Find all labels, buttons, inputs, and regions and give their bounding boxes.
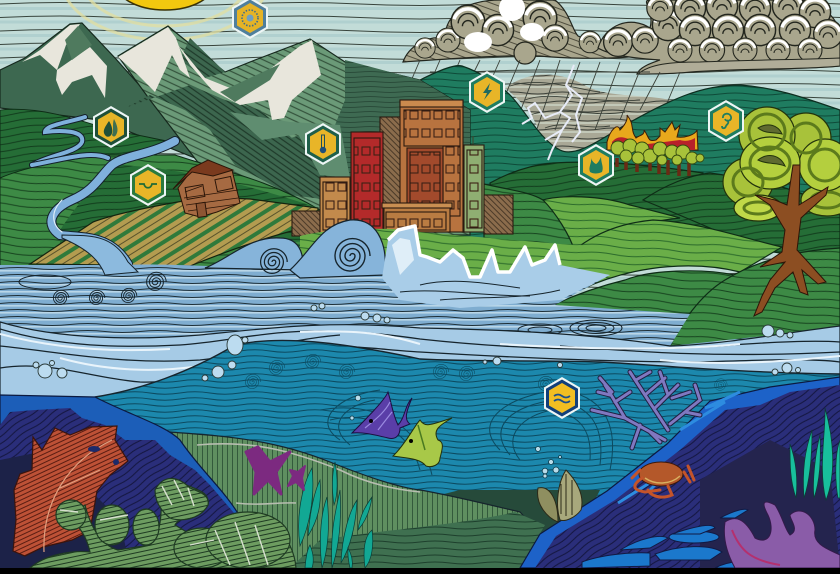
farmland	[30, 197, 318, 266]
hill: bright	[543, 197, 680, 252]
hex icon: sun	[232, 0, 268, 39]
ridge shading	[125, 85, 330, 200]
swirling waves	[19, 220, 622, 336]
sun with halo	[61, 0, 269, 40]
right hills group	[484, 162, 840, 290]
city	[292, 100, 513, 236]
purple branching coral	[592, 372, 700, 448]
hex icon: water drops	[93, 106, 129, 148]
hill: dark right	[643, 173, 840, 262]
mountain snow caps	[22, 24, 321, 120]
tree crowns	[611, 139, 704, 165]
wave: left curl	[205, 238, 303, 270]
storm cloud right	[598, 0, 840, 74]
wave: breaking foam	[382, 226, 610, 308]
burning trees	[607, 115, 704, 176]
river mouth	[62, 235, 138, 275]
bottom black strip	[0, 568, 840, 574]
icon: crab	[632, 462, 694, 497]
building: low brown right	[484, 195, 513, 234]
green coral	[30, 478, 296, 568]
mountain left dark face	[0, 23, 200, 160]
wave: centre curl	[290, 220, 385, 278]
grey rainy hill	[505, 74, 682, 154]
deep water	[0, 340, 840, 574]
island: left	[553, 271, 735, 314]
river	[32, 117, 175, 264]
seabed: dark lower	[350, 490, 600, 568]
hill: bright foreground	[560, 220, 782, 290]
ocean swirls	[245, 354, 727, 475]
lower left hill	[0, 155, 320, 270]
lightning	[522, 65, 582, 160]
rain grid	[405, 60, 680, 135]
building: tan	[320, 177, 350, 234]
pale lower water band	[0, 322, 840, 400]
icon: starfish small	[288, 466, 305, 490]
icon: red coral leaf	[13, 426, 128, 556]
hill: mid left	[484, 184, 600, 266]
upper left dark hill	[0, 109, 172, 190]
tree	[723, 107, 840, 316]
dark slope behind farmland	[60, 165, 318, 262]
left rock	[0, 395, 250, 568]
building: low front block	[382, 203, 452, 232]
teal hill behind city	[420, 66, 840, 240]
building: grey back	[380, 117, 402, 212]
building: orange tower	[400, 100, 463, 232]
hex icon: ocean waves	[544, 377, 580, 419]
island: right	[670, 248, 840, 346]
sky with horizontal lines	[0, 0, 840, 330]
bubbles from clam	[350, 395, 562, 478]
flames	[607, 115, 698, 150]
hex icon: lightning	[469, 71, 505, 113]
hill: far dark green	[490, 162, 720, 260]
seabed: green slope	[170, 432, 540, 568]
left seagrass	[299, 462, 373, 568]
bubbles at surface	[33, 303, 800, 381]
icon: purple fish	[352, 392, 412, 439]
tree canopy	[723, 107, 840, 221]
hex icon: wind	[708, 100, 744, 142]
mountain body	[118, 26, 470, 235]
hex icon: thermometer	[305, 123, 341, 165]
purple coral bottom right	[724, 502, 840, 568]
hex icon: ground subsidence	[130, 164, 166, 206]
icon: green fish	[393, 418, 452, 467]
mountain range	[0, 23, 470, 235]
icon: starfish large	[246, 447, 290, 494]
grass in front of city	[300, 229, 590, 285]
seabed: lower dark slope	[290, 512, 545, 568]
canopy rings	[733, 114, 840, 214]
hex icon: wildfire	[578, 144, 614, 186]
trunks	[617, 158, 689, 176]
house	[173, 160, 240, 217]
tree trunk	[754, 165, 828, 316]
surface water band	[0, 264, 840, 350]
building: low brown left	[292, 211, 320, 236]
building: green tower	[464, 136, 484, 232]
blue stepping stones	[582, 509, 755, 568]
building: red tower	[351, 132, 383, 230]
right rock	[520, 377, 840, 568]
right seagrass	[790, 408, 840, 500]
icon: clam shell	[538, 470, 582, 522]
storm cloud left	[403, 0, 640, 64]
right islands	[553, 248, 840, 346]
seabed	[170, 432, 600, 568]
